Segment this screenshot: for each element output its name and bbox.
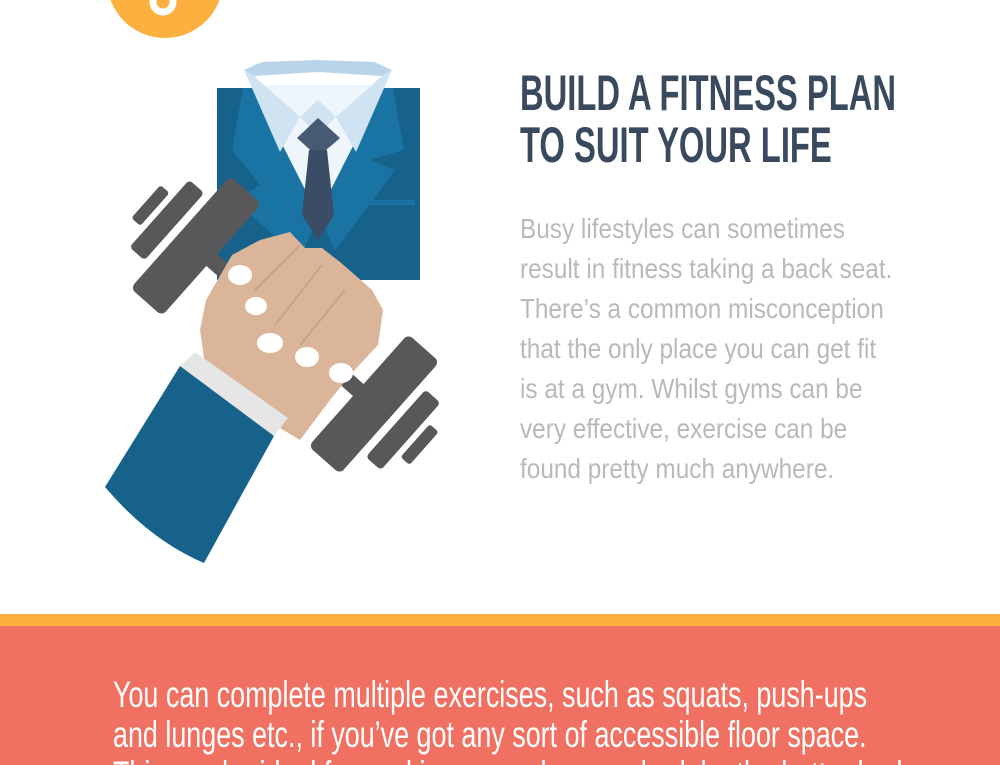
text: BUILD A FITNESS PLAN xyxy=(520,65,896,121)
illustration: hand with dumbbell and suit xyxy=(105,0,439,563)
orange stripe xyxy=(0,614,1000,626)
suit xyxy=(217,60,420,280)
icon: number badge xyxy=(107,0,223,38)
text: is at a gym. Whilst gyms can be xyxy=(520,373,863,404)
panel: bottom callout xyxy=(0,626,1000,765)
panel: bottom callout: You can complete multiple exercises, such as squats, push-ups xyxy=(113,674,867,715)
dumbbell xyxy=(96,145,474,505)
callout text xyxy=(113,674,903,765)
text: TO SUIT YOUR LIFE xyxy=(520,117,832,173)
sleeve xyxy=(105,352,288,563)
body text xyxy=(520,213,892,484)
text: found pretty much anywhere. xyxy=(520,453,834,484)
panel: bottom callout: and lunges etc., if you’ve got any sort of accessible floor space. xyxy=(113,714,867,755)
text: result in fitness taking a back seat. xyxy=(520,253,892,284)
text: There’s a common misconception xyxy=(520,293,884,324)
text: Busy lifestyles can sometimes xyxy=(520,213,845,244)
hand xyxy=(200,232,383,440)
title xyxy=(520,65,896,173)
text: very effective, exercise can be xyxy=(520,413,847,444)
text: that the only place you can get fit xyxy=(520,333,876,364)
